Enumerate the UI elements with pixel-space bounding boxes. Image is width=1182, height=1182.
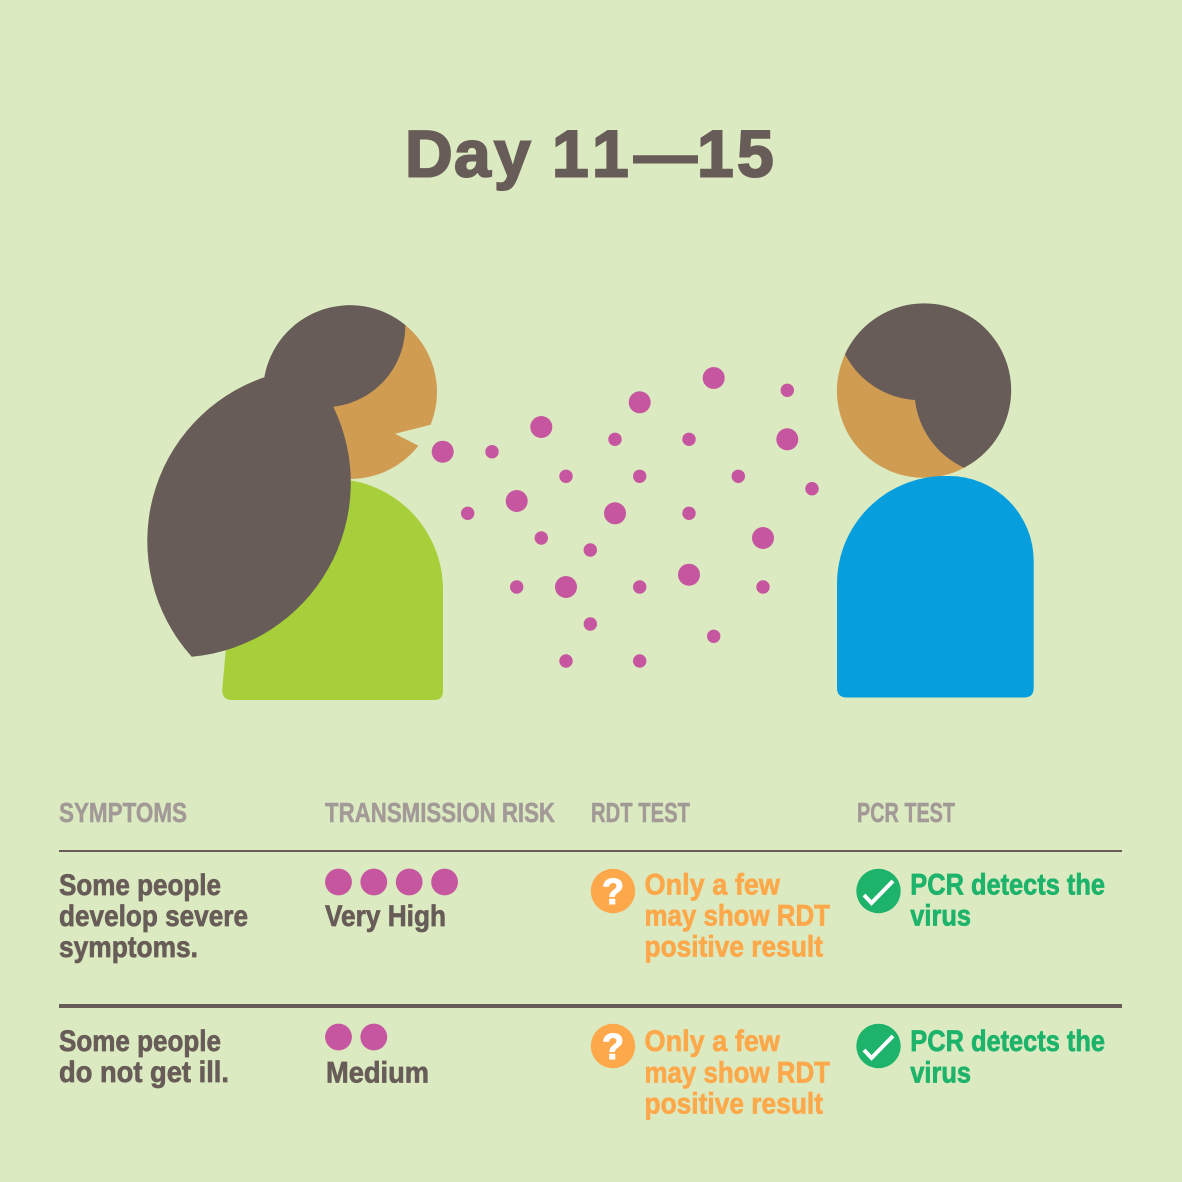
row 1 symptoms text [59,869,248,964]
title: — [634,120,697,190]
row 2 RDT question icon: ? [602,1026,624,1067]
row 2: no illness [59,1024,1105,1120]
illustration: infected woman [147,305,443,700]
row 1 RDT text [644,868,830,964]
header: symptoms: SYMPTOMS [59,797,187,828]
row 1 RDT text: positive result [644,930,823,964]
man face [837,304,1010,478]
header: RDT test: RDT TEST [591,797,690,828]
title: 11 [552,116,629,190]
man hair [845,303,1011,468]
man body [837,476,1034,698]
row 1 RDT text: Only a few [644,868,781,901]
row 2 RDT text: Only a few [644,1025,781,1058]
row 1 symptoms text: symptoms. [59,931,198,964]
row 2 RDT question icon [591,1024,635,1068]
row 2 symptoms text: Some people [59,1025,221,1058]
row 1 PCR text [910,868,1105,932]
row 2 RDT text [644,1025,830,1120]
header: PCR test: PCR TEST [857,797,955,828]
row 1 risk label: Very High [325,900,446,933]
row 2 symptoms text: do not get ill. [59,1056,229,1089]
row 2 PCR check icon [856,1024,901,1068]
row 1 PCR text: PCR detects the [910,868,1105,901]
row 2 PCR text: virus [910,1056,971,1089]
row 1 PCR text: virus [910,900,971,932]
row 1 symptoms text: Some people [59,869,221,902]
row 2 RDT text: positive result [644,1087,823,1120]
title: 15 [697,116,774,190]
table header row [59,797,955,828]
row 2 PCR text: PCR detects the [910,1025,1105,1058]
row 1: severe symptoms [59,868,1105,964]
row 2 risk label: Medium [326,1056,429,1090]
row 1 RDT question icon [591,869,635,913]
woman body [222,479,443,700]
row 2 risk dots: two of four [325,1024,387,1050]
title: Day [405,116,549,190]
row 1 symptoms text: develop severe [59,900,248,933]
woman face [333,325,437,479]
virus particles between the two people [432,367,819,668]
row 1 risk dots: four of four [325,869,458,895]
woman hair [147,305,405,657]
row 1 RDT question icon: ? [602,871,624,912]
row 1 RDT text: may show RDT [644,900,830,932]
illustration: exposed man [837,303,1034,698]
row 1 PCR check icon [856,869,901,913]
header: transmission risk: TRANSMISSION RISK [325,797,555,828]
row 2 RDT text: may show RDT [644,1056,830,1089]
row 2 PCR text [910,1025,1105,1089]
row 2 symptoms text [59,1025,229,1089]
